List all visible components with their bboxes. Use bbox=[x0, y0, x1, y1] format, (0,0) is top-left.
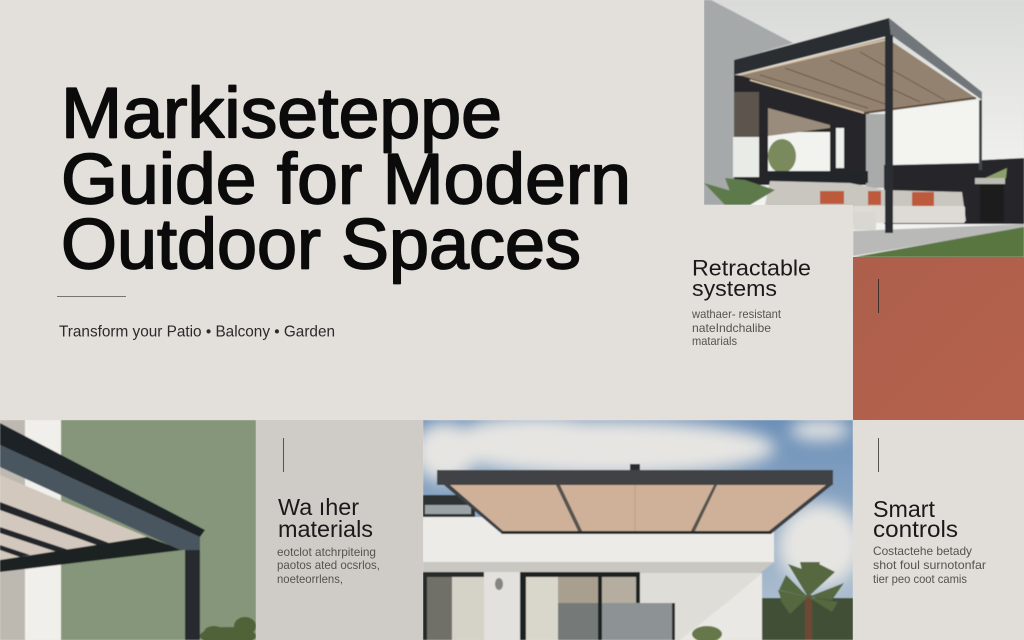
body text: retractable systems: wathaer- resistant bbox=[691, 307, 782, 321]
heading: weather materials: Wa ıher bbox=[278, 494, 359, 520]
body text: smart controls bbox=[873, 544, 986, 586]
body text: weather materials: eotclot atchrpiteing bbox=[277, 545, 376, 559]
photo: white house with retractable awning bbox=[413, 416, 862, 640]
subtitle: Transform your Patio • Balcony • Garden bbox=[59, 324, 335, 340]
house bbox=[423, 517, 774, 562]
panel: title background bbox=[0, 0, 704, 420]
heading: smart controls: Smart bbox=[873, 496, 935, 522]
body text: smart controls: tier peo coot camis bbox=[873, 572, 967, 586]
heading: smart controls: controls bbox=[873, 516, 958, 542]
distant trees and palm bbox=[762, 598, 853, 640]
title bbox=[61, 74, 631, 284]
patio and lawn bbox=[853, 224, 1024, 256]
heading: weather materials: materials bbox=[278, 516, 373, 542]
panel: retractable systems bbox=[691, 205, 853, 420]
body text: retractable systems bbox=[691, 307, 782, 348]
heading: retractable systems bbox=[692, 256, 811, 301]
heading: retractable systems: Retractable bbox=[692, 256, 811, 280]
body text: smart controls: shot foul surnotonfar bbox=[873, 558, 986, 572]
body text: retractable systems: matarials bbox=[692, 334, 737, 348]
panel: weather materials bbox=[256, 420, 423, 640]
title divider bbox=[57, 296, 126, 297]
beams bbox=[734, 18, 891, 75]
sofa bbox=[765, 181, 966, 223]
canopy underside bbox=[739, 38, 976, 113]
title: Guide for Modern bbox=[61, 140, 631, 220]
title: Markiseteppe bbox=[61, 74, 502, 154]
awning canopy bbox=[446, 485, 832, 533]
body text: retractable systems: nateIndchalibe bbox=[692, 321, 771, 335]
panel: terracotta colour block bbox=[853, 257, 1024, 420]
heading: retractable systems: systems bbox=[692, 276, 777, 301]
photo: pergola corner on green wall bbox=[0, 420, 256, 640]
photo: pergola with outdoor sofa bbox=[704, 0, 1024, 257]
body text: weather materials bbox=[277, 545, 380, 586]
body text: smart controls: Costactehe betady bbox=[873, 544, 972, 558]
body text: weather materials: noeteorrlens, bbox=[277, 572, 343, 586]
upper window bbox=[423, 495, 475, 517]
plant and side table bbox=[704, 178, 775, 205]
heading: smart controls bbox=[873, 496, 958, 542]
front post bbox=[885, 35, 893, 233]
panel: smart controls bbox=[853, 420, 1024, 640]
heading: weather materials bbox=[278, 494, 373, 542]
body text: weather materials: paotos ated ocsrlos, bbox=[277, 558, 380, 572]
title: Outdoor Spaces bbox=[61, 204, 581, 284]
awning fascia bbox=[437, 470, 833, 485]
